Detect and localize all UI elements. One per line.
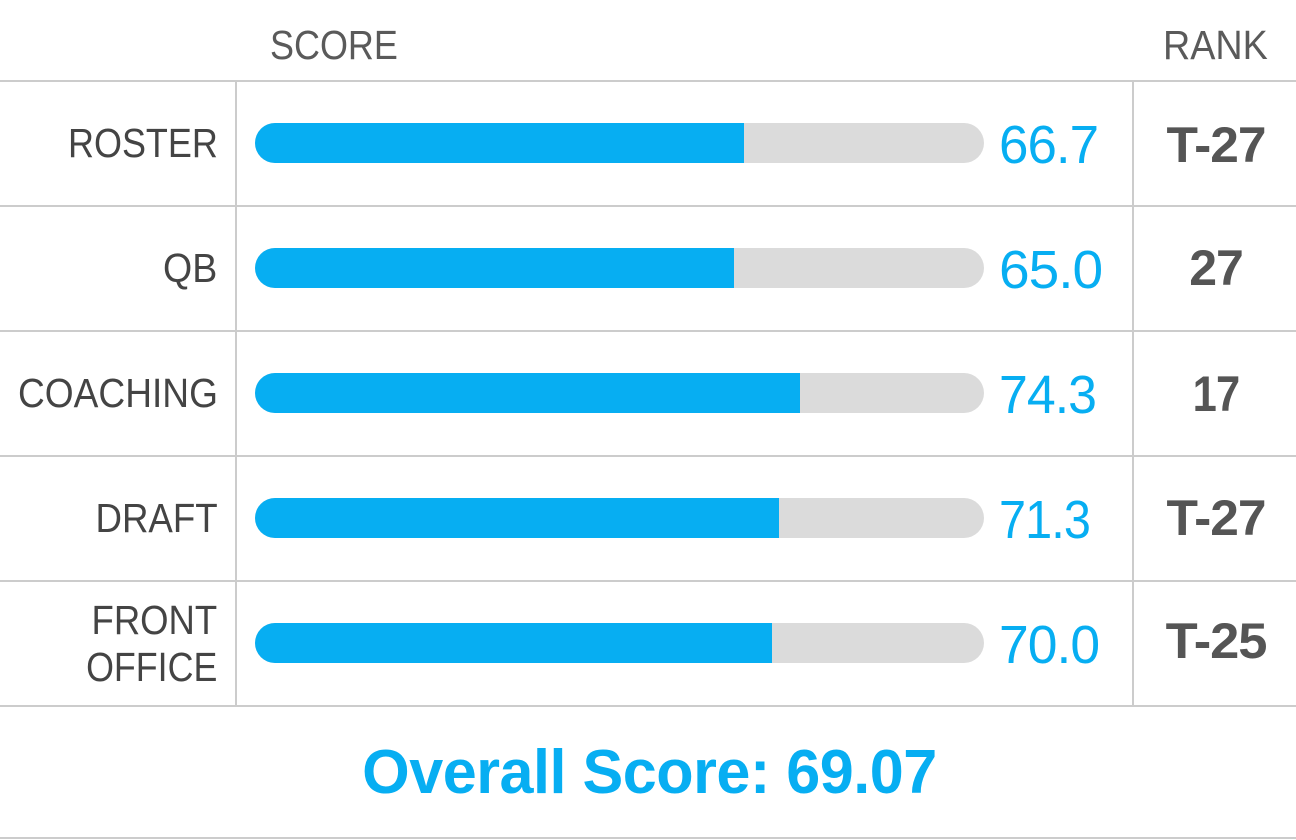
bar: coaching <box>255 373 984 413</box>
value: roster score: 66.7 <box>999 115 1098 175</box>
bar: qb <box>255 248 984 288</box>
bar: front office <box>255 623 984 663</box>
rank: coaching: 17 <box>1193 366 1239 422</box>
heading: rank column: RANK <box>1163 22 1268 68</box>
label: roster: ROSTER <box>68 120 218 166</box>
label: front office second line: OFFICE <box>86 644 217 690</box>
rank: qb: 27 <box>1189 240 1243 296</box>
overall score: Overall Score: 69.07 <box>362 738 937 807</box>
label: coaching: COACHING <box>18 370 218 416</box>
value: qb score: 65.0 <box>999 240 1102 300</box>
bar: roster <box>255 123 984 163</box>
rank: front office: T-25 <box>1166 613 1266 669</box>
heading: score column: SCORE <box>270 22 398 68</box>
rank: draft: T-27 <box>1167 490 1265 546</box>
value: draft score: 71.3 <box>999 490 1090 550</box>
value: front office score: 70.0 <box>999 615 1099 675</box>
rank: roster: T-27 <box>1167 117 1265 173</box>
label: front office: FRONT <box>91 597 217 643</box>
value: coaching score: 74.3 <box>999 365 1096 425</box>
bar: draft <box>255 498 984 538</box>
label: qb: QB <box>163 245 217 291</box>
label: draft: DRAFT <box>96 495 218 541</box>
